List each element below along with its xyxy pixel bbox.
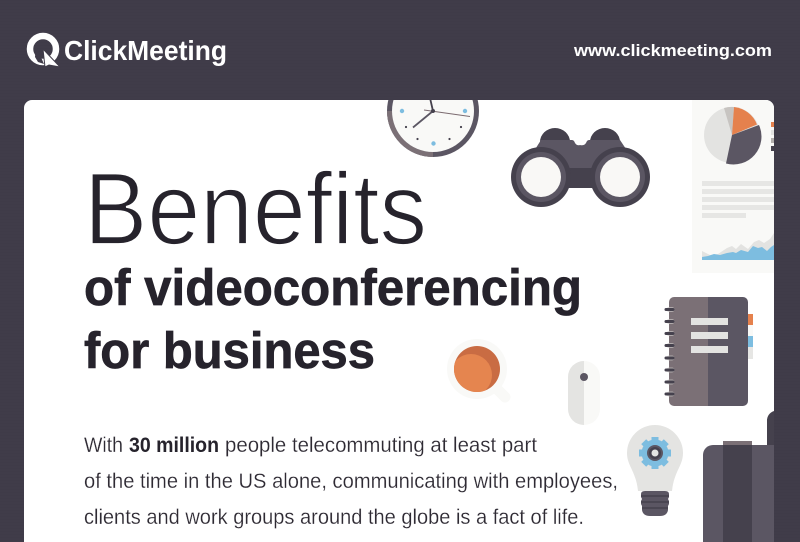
title: Benefits: Benefits <box>84 152 427 266</box>
website url: www.clickmeeting.com <box>573 41 772 60</box>
intro text block: clients and work groups around the globe is a fact of life. <box>84 506 584 529</box>
intro text block: people telecommuting at least part <box>225 434 537 457</box>
report text lines <box>702 181 774 218</box>
subtitle line 2: for business <box>84 322 375 379</box>
intro text block: 30 million <box>129 434 219 457</box>
intro text block: of the time in the US alone, communicating with employees, <box>84 470 618 493</box>
icon: computer mouse <box>568 361 588 425</box>
icon: wall clock <box>387 100 479 157</box>
intro text block <box>84 434 618 529</box>
panel: report sheet <box>702 100 774 260</box>
icon: briefcase <box>703 411 774 542</box>
logo wordmark: ClickMeeting <box>64 35 227 66</box>
area chart <box>702 233 774 260</box>
pie chart <box>704 107 761 165</box>
chart legend <box>771 122 774 151</box>
icon: notebook <box>666 297 753 406</box>
logo: ClickMeeting <box>30 35 227 67</box>
icon: binoculars <box>511 128 650 207</box>
subtitle line 1: of videoconferencing <box>84 259 582 316</box>
icon: coffee cup <box>454 346 500 392</box>
intro text block: With <box>84 434 123 457</box>
icon: light bulb with gear <box>627 425 683 516</box>
icon: logo cursor ring <box>30 36 60 67</box>
